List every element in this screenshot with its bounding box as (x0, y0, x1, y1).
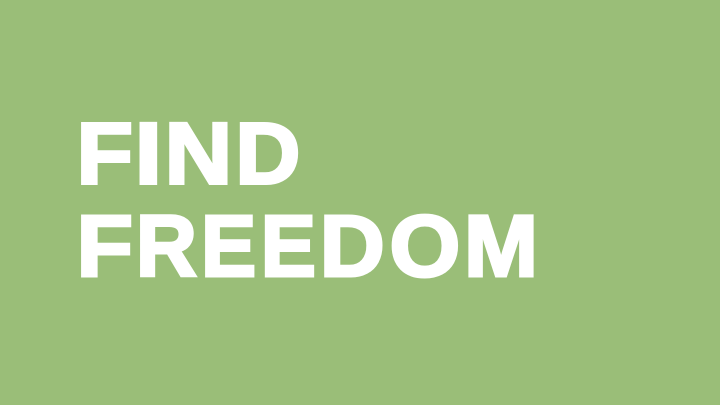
heading line: FREEDOM: E (261, 198, 316, 295)
heading line: FIND: N (165, 106, 232, 202)
heading line: FIND: D (235, 106, 300, 202)
heading line: FREEDOM (76, 198, 538, 295)
heading line: FREEDOM: E (201, 198, 256, 295)
heading line: FIND: F (76, 106, 133, 202)
heading line: FREEDOM: O (390, 198, 460, 295)
heading line: FIND (76, 106, 300, 202)
heading line: FREEDOM: F (76, 198, 133, 295)
title (76, 106, 538, 295)
heading line: FREEDOM: M (464, 198, 538, 295)
heading line: FREEDOM: R (136, 198, 197, 295)
heading line: FREEDOM: D (320, 198, 385, 295)
heading line: FIND: I (135, 106, 162, 202)
